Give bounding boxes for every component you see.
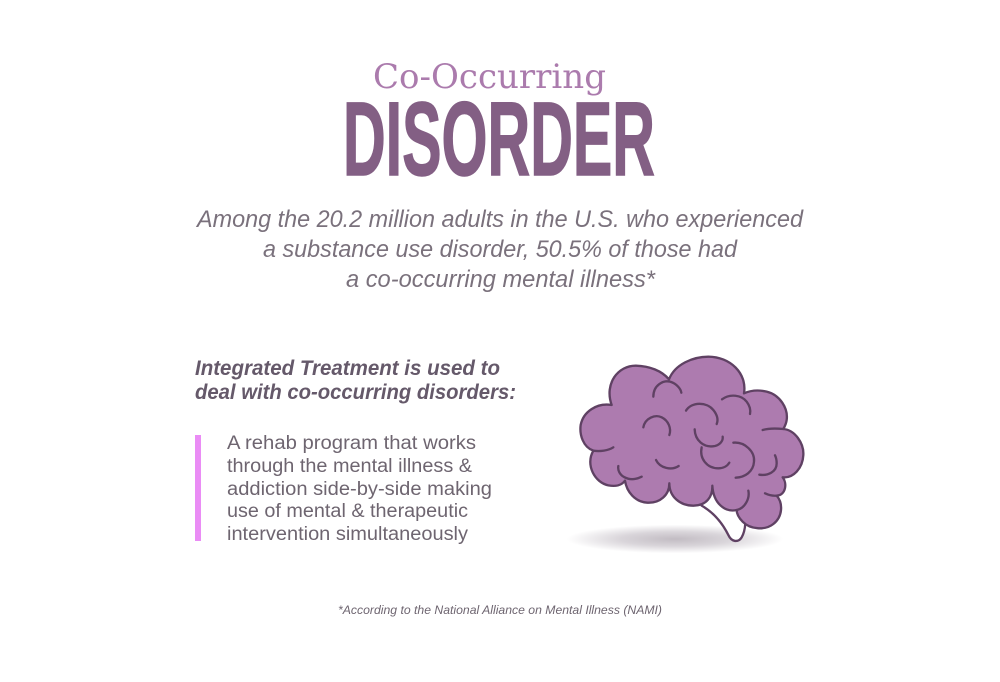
title: Co-Occurring: Co-Occurring	[373, 57, 606, 97]
brain stem	[702, 506, 745, 541]
intro text: a substance use disorder, 50.5% of those had	[263, 236, 738, 263]
subheading: Integrated Treatment: deal with co-occurring disorders:	[195, 381, 516, 404]
body text: use of mental & therapeutic	[227, 501, 468, 522]
brain folds	[593, 381, 783, 510]
subheading: Integrated Treatment	[195, 357, 516, 404]
intro text: a co-occurring mental illness*	[346, 266, 656, 293]
icon: brain	[567, 357, 803, 553]
footnote: *According to the National Alliance on Mental Illness (NAMI)	[338, 603, 662, 617]
body text	[227, 433, 492, 545]
intro text	[195, 206, 804, 293]
title: DISORDER: DISORDER	[343, 81, 655, 198]
body text: A rehab program that works	[227, 433, 476, 454]
brain outline	[580, 357, 803, 528]
body text: addiction side-by-side making	[227, 479, 492, 500]
body text: through the mental illness &	[227, 456, 472, 477]
brain shadow	[567, 525, 783, 553]
intro text: Among the 20.2 million adults in the U.S. who experienced	[195, 206, 804, 233]
accent bar	[195, 435, 201, 541]
subheading: Integrated Treatment: Integrated Treatment is used to	[195, 357, 500, 380]
body text: intervention simultaneously	[227, 524, 469, 545]
